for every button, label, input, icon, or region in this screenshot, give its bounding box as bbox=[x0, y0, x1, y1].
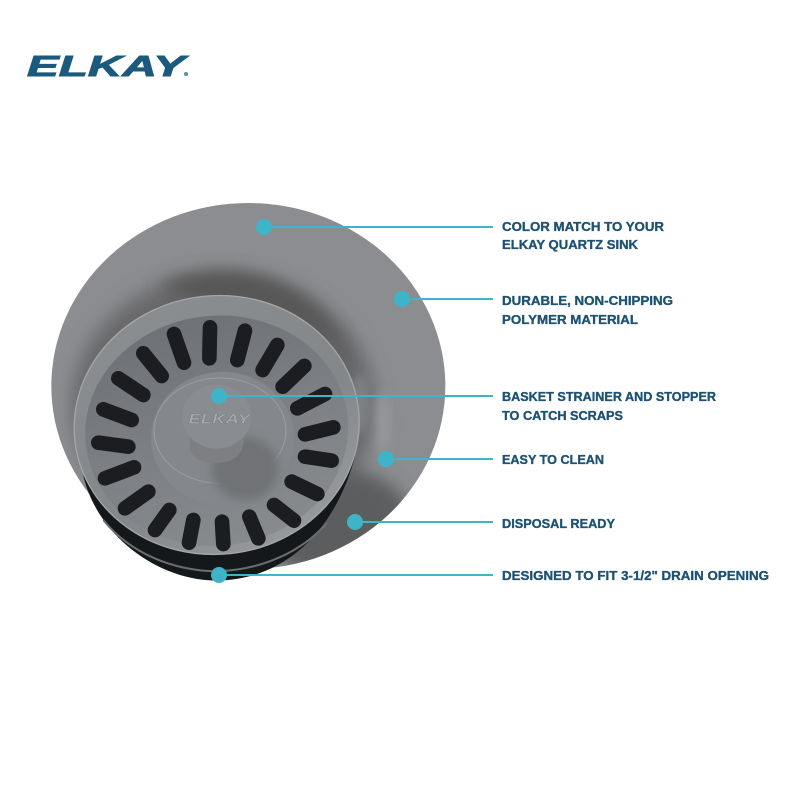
callout: color match: COLOR MATCH TO YOUR bbox=[502, 219, 665, 234]
logo: ELKAY bbox=[27, 51, 189, 83]
callout: durable: POLYMER MATERIAL bbox=[502, 312, 638, 327]
callout: durable: DURABLE, NON-CHIPPING bbox=[502, 293, 673, 308]
callout: drain opening bbox=[211, 567, 769, 583]
strainer slots bbox=[98, 327, 333, 544]
centre hub bbox=[151, 372, 294, 505]
stopper stem bbox=[190, 423, 248, 463]
callout: easy to clean bbox=[378, 451, 604, 467]
logo: ELKAY: ELKAY bbox=[27, 51, 189, 83]
callout: drain opening: DESIGNED TO FIT 3-1/2" DRAIN OPENING bbox=[502, 568, 769, 583]
embossed ELKAY mark: ELKAY bbox=[188, 410, 252, 426]
product photo: drain flange with basket strainer bbox=[51, 203, 445, 581]
stopper cap bbox=[182, 385, 251, 449]
callout: durable bbox=[394, 291, 673, 327]
bowl shading bbox=[72, 272, 412, 578]
callout: disposal ready: DISPOSAL READY bbox=[502, 516, 615, 531]
callout: disposal ready bbox=[347, 514, 615, 531]
stopper shadow bbox=[212, 437, 278, 500]
basket dish bbox=[74, 303, 360, 559]
callout: basket strainer bbox=[211, 388, 717, 423]
callout: color match: ELKAY QUARTZ SINK bbox=[502, 237, 639, 252]
callout: color match bbox=[256, 219, 665, 252]
basket rim bbox=[61, 281, 372, 569]
callout: basket strainer: TO CATCH SCRAPS bbox=[502, 408, 623, 423]
callout: basket strainer: BASKET STRAINER AND STOPPER bbox=[502, 389, 717, 404]
flange bbox=[51, 203, 445, 569]
callout: easy to clean: EASY TO CLEAN bbox=[502, 452, 604, 467]
rubber seal bbox=[82, 423, 355, 581]
